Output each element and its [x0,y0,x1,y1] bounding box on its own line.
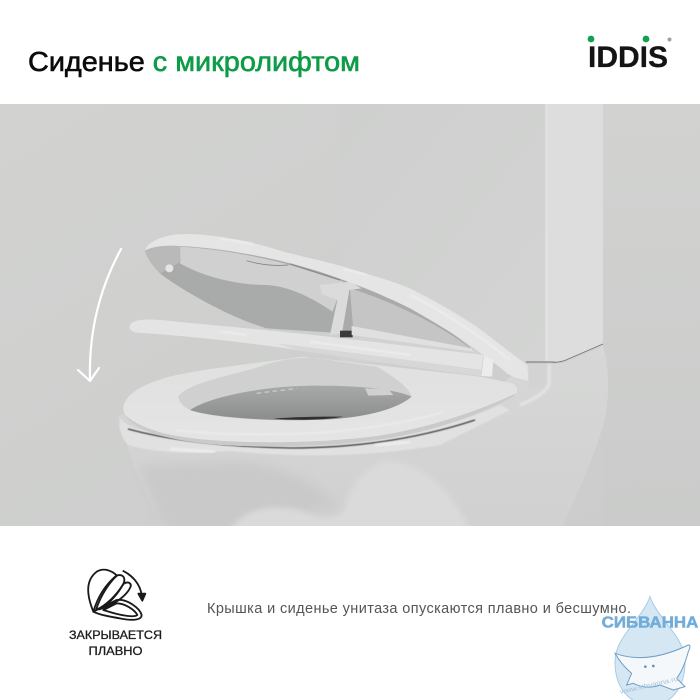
icon: closes smoothly [88,570,145,620]
lid rim [145,234,528,381]
text: ПЛАВНО [88,644,142,658]
photo: toilet seat with soft-close lid [0,104,700,530]
description text: Крышка и сиденье унитаза опускаются плавно и бесшумно. [207,601,631,617]
cistern side [545,104,603,362]
logo: IDDIS: IDDIS [588,41,668,74]
icon caption: ЗАКРЫВАЕТСЯ [69,628,162,642]
watermark: Sibvanna: СИБВАННА [602,614,698,631]
lid hinge strut [320,282,362,335]
cistern front [340,104,545,362]
watermark: Sibvanna [602,597,698,700]
bowl rim under seat [119,405,510,455]
photo motion arrow [78,249,121,381]
watermark: Sibvanna: www.sibvanna.ru [618,676,679,696]
right wall [603,104,700,526]
bowl interior [190,386,412,420]
seat opening [178,357,412,420]
closed ring seat [123,357,517,446]
lid underside [145,246,473,350]
wall [0,104,603,526]
seat hinge [481,355,493,377]
title: Сиденье с микролифтом [28,46,360,77]
pedestal [508,346,608,406]
raised seat ring [129,319,483,376]
cistern joint line [526,344,603,362]
bowl shading and highlights [149,468,318,522]
